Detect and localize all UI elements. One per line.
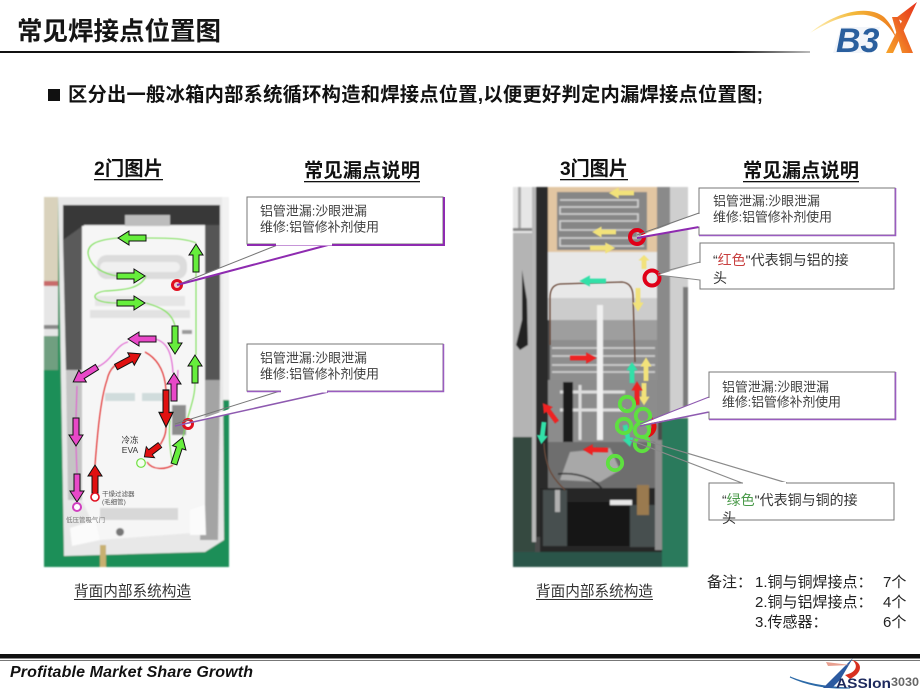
heading: common leak notes left: 常见漏点说明 (304, 160, 420, 182)
photo: 3-door fridge back (513, 187, 688, 567)
flow arrows yellow (590, 187, 652, 405)
callout: right upper (637, 188, 896, 238)
green rings (608, 397, 650, 470)
callout: red legend: 头 (713, 270, 727, 286)
title rule (0, 51, 810, 53)
callout: red legend: “红色"代表铜与铝的接 (713, 252, 849, 268)
callout: right lower (640, 372, 896, 426)
bullet intro line: 区分出一般冰箱内部系统循环构造和焊接点位置,以便更好判定内漏焊接点位置图; (68, 83, 763, 106)
label: dry filter (102, 489, 135, 506)
flow arrows magenta (69, 332, 181, 502)
callout: green legend (630, 436, 894, 526)
callout: green legend: “绿色"代表铜与铜的接 (722, 492, 858, 508)
footer tagline: Profitable Market Share Growth (10, 664, 253, 681)
red rings (630, 230, 660, 286)
label: freezer EVA: 冷冻 (121, 435, 139, 445)
notes: joint counts: 1.铜与铜焊接点： (755, 574, 873, 591)
heading: 2 door photo: 2门图片 (94, 158, 163, 180)
label: freezer EVA: EVA (122, 445, 139, 455)
label: freezer EVA (121, 435, 139, 455)
notes: joint counts: 6个 (883, 614, 906, 631)
notes: joint counts (707, 574, 906, 631)
heading: 3 door photo: 3门图片 (560, 158, 628, 180)
photo: 2-door fridge back with refrigerant circuit (44, 197, 229, 567)
heading: common leak notes right: 常见漏点说明 (743, 160, 859, 182)
callout: left lower: 铝管泄漏:沙眼泄漏 (260, 350, 367, 366)
callout: left upper: 铝管泄漏:沙眼泄漏 (260, 204, 367, 218)
photo background (513, 187, 688, 567)
logo: B3X: B3 (836, 22, 880, 60)
label: dry filter: (毛细管) (102, 497, 126, 506)
notes: joint counts: 3.传感器： (755, 614, 828, 631)
copper wire loop (544, 282, 635, 490)
title: 常见焊接点位置图 (17, 17, 221, 46)
flow arrows green (117, 231, 203, 466)
label: low pressure valve: 低压管吸气门 (66, 515, 105, 524)
callout: right upper: 铝管泄漏:沙眼泄漏 (713, 194, 820, 208)
callout: right lower: 铝管泄漏:沙眼泄漏 (722, 380, 829, 394)
solder ring: top evaporator (172, 280, 182, 290)
joint: suction valve (73, 503, 81, 511)
circuit pipes (76, 238, 196, 474)
notes: joint counts: 2.铜与铝焊接点： (755, 594, 873, 611)
solder ring: lower right (184, 420, 192, 428)
photo background (44, 197, 229, 567)
caption left: 背面内部系统构造 (74, 583, 191, 600)
callout: left upper (177, 197, 444, 285)
callout: left lower: 维修:铝管修补剂使用 (260, 366, 379, 382)
callout: left upper: 维修:铝管修补剂使用 (260, 220, 379, 234)
callout: right lower: 维修:铝管修补剂使用 (722, 394, 841, 410)
notes: joint counts: 4个 (883, 594, 906, 611)
callout: left lower (175, 344, 444, 426)
flow arrows red (88, 348, 173, 493)
footer rules (0, 654, 920, 661)
notes: joint counts: 备注： (707, 574, 752, 591)
logo: B3X (810, 2, 917, 60)
logo: Passion 3030: 3030 (891, 675, 919, 689)
notes: joint counts: 7个 (883, 574, 906, 591)
red arc joint (648, 418, 654, 435)
joint: EVA (137, 459, 145, 467)
callout: red legend (658, 243, 894, 289)
callout: green legend: 头 (722, 510, 736, 526)
label: dry filter: 干燥过滤器 (102, 489, 135, 498)
logo: Passion 3030 (790, 658, 919, 690)
flow arrows teal (536, 275, 638, 448)
flow arrows red (538, 352, 643, 456)
joint: filter (91, 493, 99, 501)
caption right: 背面内部系统构造 (536, 583, 653, 600)
callout: right upper: 维修:铝管修补剂使用 (713, 210, 832, 224)
